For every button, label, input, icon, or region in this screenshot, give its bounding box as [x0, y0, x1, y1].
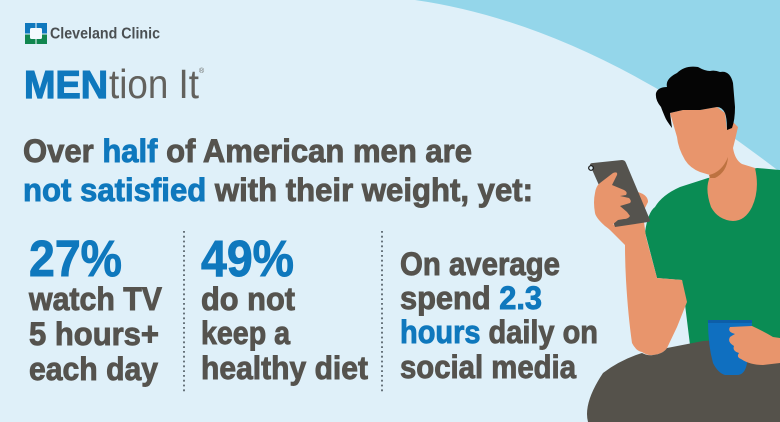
hand fingers — [594, 172, 646, 241]
stat: 27% watch TV: watch TV — [28, 281, 163, 317]
table — [587, 339, 780, 422]
heading: Over half of American men are — [23, 133, 472, 169]
stat: 27% watch TV — [28, 230, 163, 387]
stat: social media: social media — [400, 349, 576, 385]
stat: social media — [400, 246, 598, 385]
stat: 49% diet: do not — [201, 281, 295, 317]
title: MENtion It: ® — [199, 67, 205, 75]
divider — [183, 231, 185, 393]
title: MENtion It: MEN — [24, 64, 108, 107]
stat: 27% watch TV: each day — [29, 351, 158, 387]
heading — [23, 133, 533, 208]
divider — [381, 231, 383, 393]
hand on mug — [729, 326, 780, 365]
stat: 27% watch TV: 27% — [29, 230, 122, 287]
shirt — [645, 168, 780, 345]
phone — [589, 160, 650, 227]
stat: 49% diet: 49% — [201, 230, 294, 287]
hand back — [638, 192, 648, 210]
arm — [605, 222, 687, 355]
stat: social media: On average — [400, 246, 560, 282]
logo: Cleveland Clinic — [25, 23, 160, 44]
stat: 49% diet: keep a — [201, 315, 290, 351]
chin shadow — [709, 157, 728, 178]
icon: logo cross — [25, 23, 47, 44]
stat: social media: spend 2.3 — [400, 280, 542, 316]
stat: 49% diet — [201, 230, 368, 386]
logo wordmark: Cleveland Clinic — [50, 26, 160, 42]
title: MENtion It — [24, 61, 205, 107]
neck and face — [670, 107, 757, 221]
heading: not satisfied with their weight, yet: — [23, 172, 533, 208]
background curve — [415, 0, 780, 172]
hair — [656, 67, 735, 130]
title: MENtion It: tion It — [109, 61, 200, 107]
stat: social media: hours daily on — [400, 314, 598, 350]
mug — [708, 320, 752, 375]
stat: 49% diet: healthy diet — [201, 350, 368, 386]
stat: 27% watch TV: 5 hours+ — [29, 316, 159, 352]
illustration: man with phone — [587, 67, 780, 422]
